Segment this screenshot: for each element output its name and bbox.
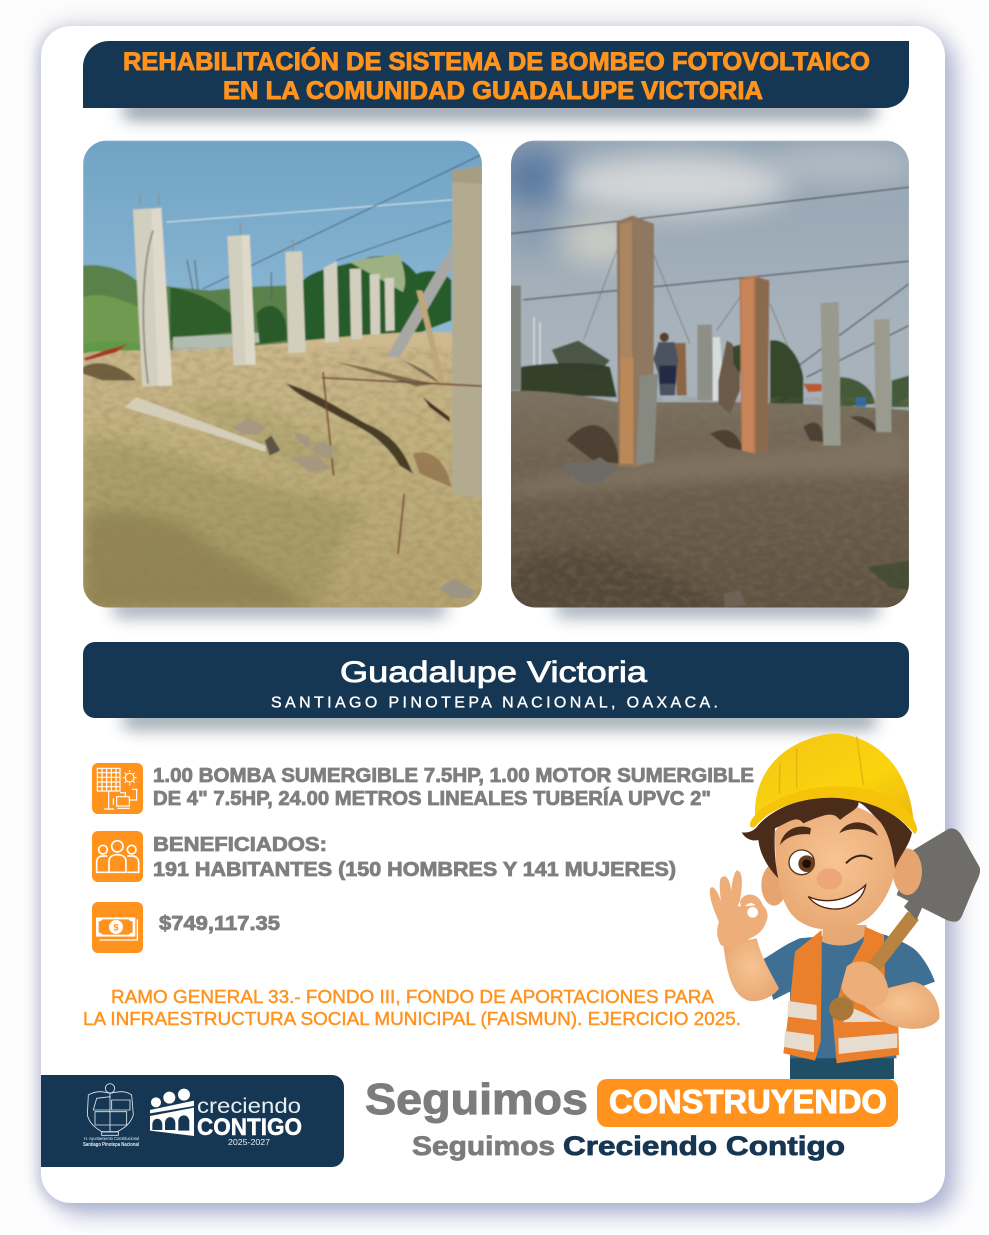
slogan: seguimos construyendo: Seguimos (365, 1075, 588, 1124)
neck (822, 925, 867, 946)
panel: footer logos (41, 1075, 344, 1167)
slogan: seguimos creciendo contigo: Seguimos (412, 1131, 555, 1161)
debris (562, 457, 617, 484)
pants (790, 1055, 894, 1079)
scaffold (386, 245, 451, 357)
shovel handle (840, 916, 913, 1011)
vest (783, 930, 822, 1061)
slogan: seguimos creciendo contigo (412, 1131, 845, 1161)
text: funding source: RAMO GENERAL 33.- FONDO III, FONDO DE APORTACIONES PARA (111, 986, 715, 1007)
icon: banknote (92, 902, 143, 953)
panel: footer logos: CONTIGO (197, 1114, 302, 1141)
big pillar (452, 165, 483, 499)
panel: footer logos: 2025-2027 (228, 1137, 270, 1147)
workers (653, 342, 678, 395)
panel: footer logos: H. Ayuntamiento Constitucional (84, 1136, 139, 1142)
panel: footer logos: Santiago Pinotepa Nacional (83, 1142, 140, 1148)
photo shadows (112, 598, 880, 618)
right arm and hand (863, 982, 939, 1029)
text: equipment (153, 765, 754, 810)
treeline (520, 363, 617, 397)
slogan: seguimos construyendo (365, 1075, 898, 1127)
wink (846, 856, 872, 863)
text: equipment: DE 4" 7.5HP, 24.00 METROS LINEALES TUBERÍA UPVC 2" (153, 787, 711, 810)
logo: creciendo contigo mark (150, 1089, 194, 1136)
location banner: SANTIAGO PINOTEPA NACIONAL, OAXACA. (271, 694, 718, 712)
eyebrows (780, 822, 878, 845)
hair (742, 798, 912, 878)
title banner (83, 41, 909, 120)
slogan: seguimos construyendo: CONSTRUYENDO (609, 1083, 887, 1120)
shovel blade (897, 828, 980, 922)
slogan: seguimos creciendo contigo: Creciendo Contigo (563, 1131, 845, 1161)
photo: left, concrete pillars under blue sky (83, 140, 483, 610)
shirt (762, 932, 935, 1058)
ground (510, 390, 910, 610)
icon: municipal coat of arms (87, 1084, 133, 1135)
text: beneficiaries: BENEFICIADOS: (153, 834, 327, 856)
icon: banknote: $ (113, 922, 119, 932)
panel: footer logos: creciendo (197, 1095, 301, 1118)
plank and stones (125, 397, 266, 452)
wires and stakes (322, 378, 482, 386)
text: funding source (83, 986, 741, 1029)
pillars (510, 285, 521, 390)
photo: right, formwork pillars under cloudy sky (497, 140, 920, 610)
ok hand (710, 870, 767, 947)
pillars (133, 208, 395, 386)
head (775, 802, 897, 930)
nose (817, 868, 842, 890)
text: amount: $749,117.35 (159, 913, 280, 935)
title banner: REHABILITACIÓN DE SISTEMA DE BOMBEO FOTOVOLTAICO (123, 46, 870, 76)
illustration: worker mascot with shovel (710, 733, 980, 1079)
location banner (83, 642, 909, 730)
icon: solar panel and pump (92, 763, 143, 814)
location banner: Guadalupe Victoria (340, 656, 647, 689)
mouth (808, 885, 866, 909)
helmet (755, 733, 913, 818)
eye (789, 850, 814, 875)
icon: people (92, 831, 143, 882)
text: beneficiaries (153, 834, 676, 881)
text: equipment: 1.00 BOMBA SUMERGIBLE 7.5HP, 1.00 MOTOR SUMERGIBLE (153, 765, 754, 787)
title banner: EN LA COMUNIDAD GUADALUPE VICTORIA (223, 77, 763, 105)
ears (761, 864, 787, 906)
text: funding source: LA INFRAESTRUCTURA SOCIAL MUNICIPAL (FAISMUN). EJERCICIO 2025. (83, 1008, 741, 1029)
left arm (723, 938, 779, 1001)
text: beneficiaries: 191 HABITANTES (150 HOMBRES Y 141 MUJERES) (153, 859, 676, 881)
